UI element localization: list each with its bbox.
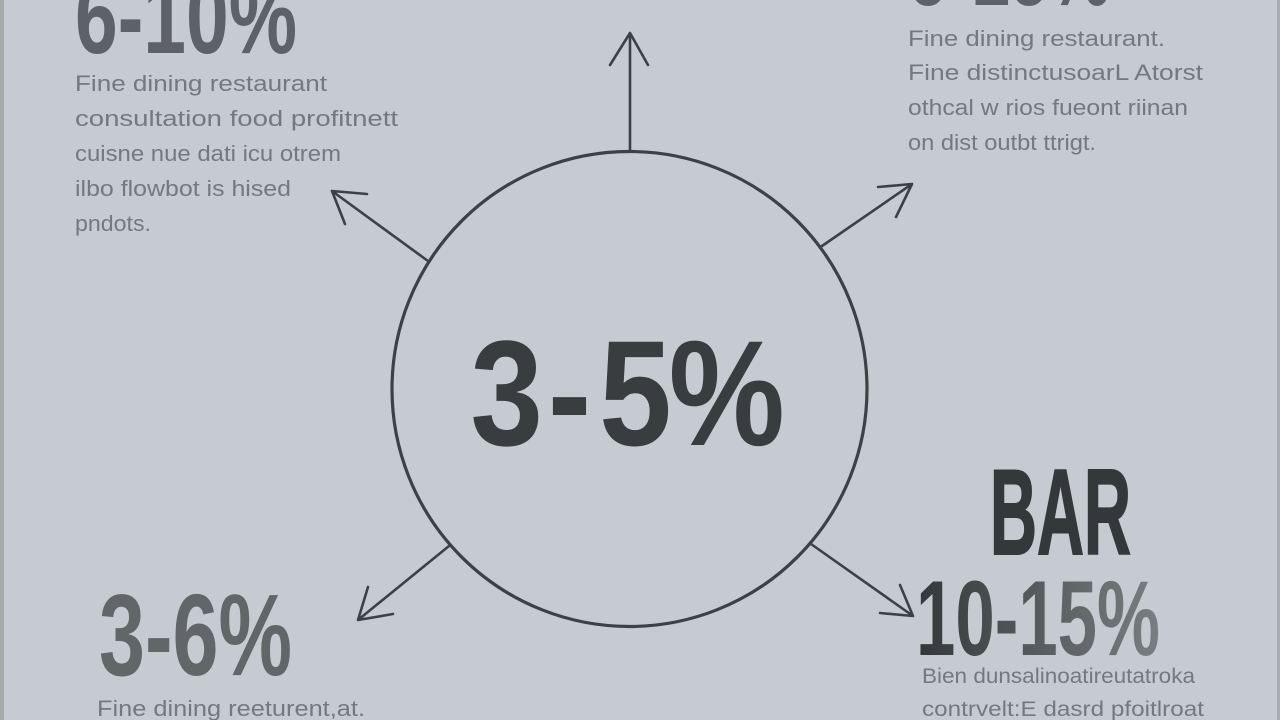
description: top left: consultation food profitnett	[75, 106, 398, 131]
description: top left: cuisne nue dati icu otrem	[75, 141, 341, 166]
description: bar	[922, 665, 1204, 720]
description: top right: on dist outbt ttrigt.	[908, 130, 1096, 155]
arrow: up	[610, 33, 648, 150]
description: top left: ilbo flowbot is hised	[75, 176, 291, 201]
percentage: 10-15%: 10-15%	[916, 558, 1160, 678]
description: top right: othcal w rios fueont riinan	[908, 95, 1188, 120]
description: top right: Fine dining restaurant.	[908, 26, 1165, 51]
panel: top right	[908, 0, 1203, 155]
description: bar: Bien dunsalinoatireutatroka	[922, 665, 1195, 688]
central percentage: 3-5%	[470, 309, 785, 477]
description: top right	[908, 26, 1203, 155]
heading: BAR: BAR	[990, 444, 1131, 580]
percentage: 3-6%: 3-6%	[99, 570, 292, 700]
arrow: upper left	[332, 191, 428, 261]
arrow: upper right	[822, 184, 912, 246]
arrow: lower left	[358, 546, 449, 620]
panel: top left	[75, 0, 398, 236]
description: top left: Fine dining restaurant	[75, 71, 327, 96]
central circle with main figure	[392, 152, 867, 626]
description: top left	[75, 71, 398, 236]
arrow: lower right	[811, 544, 913, 616]
description: top right: Fine distinctusoarL Atorst	[908, 60, 1203, 85]
description: top left: pndots.	[75, 211, 151, 236]
panel: bar	[916, 444, 1204, 720]
panel: bottom left	[97, 570, 365, 720]
